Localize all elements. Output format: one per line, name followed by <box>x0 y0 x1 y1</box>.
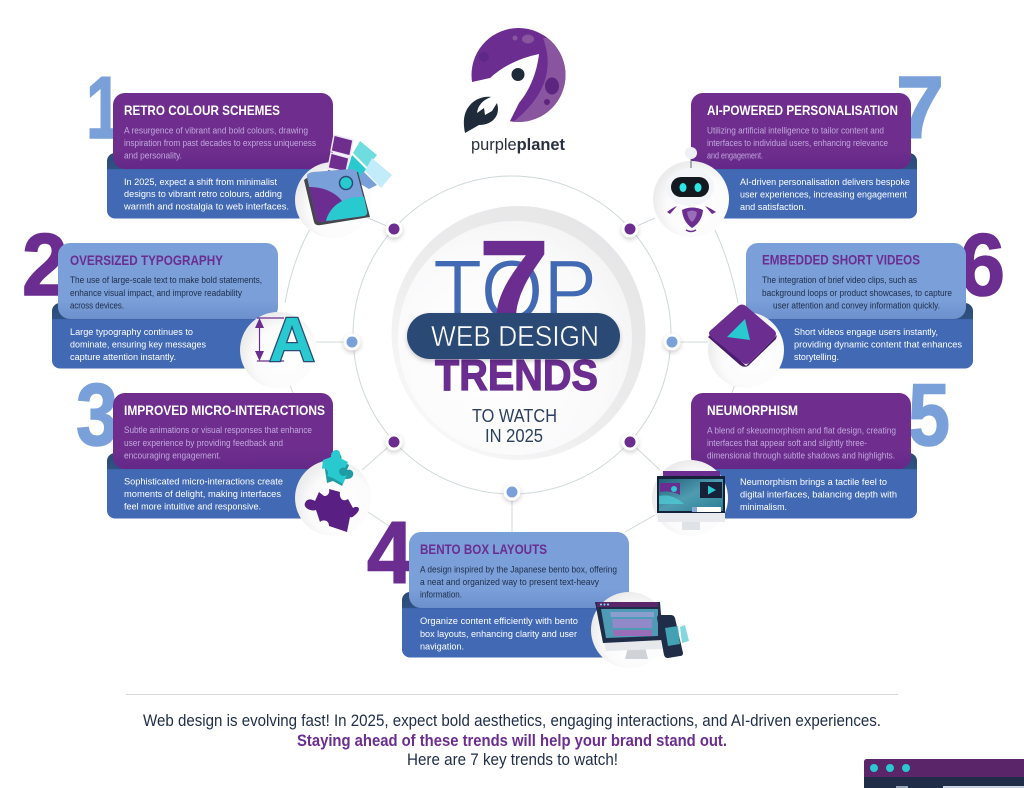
title pill: WEB DESIGN: WEB DESIGN <box>431 321 599 353</box>
detail text: warmth and nostalgia to web interfaces. <box>123 202 289 212</box>
detail text: Neumorphism brings a tactile feel to <box>740 477 887 488</box>
number 5: 5 <box>908 365 950 464</box>
title block <box>407 218 620 446</box>
number 1: 1 <box>86 58 122 157</box>
description: across devices. <box>70 300 124 310</box>
description: A blend of skeuomorphism and flat design, creating <box>707 426 896 436</box>
panel: 5 neumorphism <box>652 365 950 536</box>
icon: desktop monitor <box>652 460 728 536</box>
description: encouraging engagement. <box>124 450 221 460</box>
description <box>124 126 317 160</box>
panel: 7 ai-powered personalisation <box>653 58 944 237</box>
detail text <box>124 476 283 512</box>
description: and engagement. <box>707 150 763 160</box>
detail text: minimalism. <box>740 502 787 513</box>
icon: robot assistant <box>653 147 729 237</box>
heading: NEUMORPHISM <box>707 402 798 418</box>
detail text: providing dynamic content that enhances <box>794 340 962 350</box>
detail text: storytelling. <box>794 352 839 363</box>
detail text: In 2025, expect a shift from minimalist <box>124 177 277 188</box>
description: A design inspired by the Japanese bento box, offering <box>420 564 617 574</box>
detail text <box>740 477 897 513</box>
heading: EMBEDDED SHORT VIDEOS <box>762 252 920 268</box>
heading: RETRO COLOUR SCHEMES <box>124 102 280 118</box>
description: information. <box>420 590 462 600</box>
description: The use of large-scale text to make bold statements, <box>70 275 262 285</box>
description: The integration of brief video clips, such as <box>762 275 918 285</box>
heading: AI-POWERED PERSONALISATION <box>707 102 898 118</box>
panel: 3 improved micro-interactions <box>76 365 371 536</box>
number 2: 2 <box>22 215 68 314</box>
detail text: dominate, ensuring key messages <box>70 340 206 350</box>
description <box>124 425 312 460</box>
number 6: 6 <box>959 215 1005 314</box>
detail text: digital interfaces, balancing depth with <box>740 490 897 500</box>
title numeral: 7: 7 <box>479 218 549 345</box>
description: and personality. <box>124 150 182 160</box>
detail text: AI-driven personalisation delivers bespoke <box>740 177 910 188</box>
description: user attention and convey information quickly. <box>773 300 940 310</box>
subtitle: TO WATCH <box>472 405 557 426</box>
browser window graphic <box>864 759 1024 788</box>
title word: TOP: TOP <box>433 243 597 339</box>
detail text <box>420 616 578 652</box>
panel: 6 embedded short videos <box>708 215 1005 388</box>
footer text: Here are 7 key trends to watch! <box>407 751 618 769</box>
panel: 2 oversized typography <box>22 215 316 388</box>
panel: 1 retro colour schemes <box>86 58 392 238</box>
description <box>420 564 617 600</box>
detail text: navigation. <box>420 642 464 652</box>
footer text <box>143 712 881 769</box>
panel: 4 bento box layouts <box>367 503 689 668</box>
icon: planet and rocket <box>458 28 570 133</box>
detail text: user experiences, increasing engagement <box>740 190 907 200</box>
description: background loops or product showcases, to capture <box>762 288 952 298</box>
icon: colour swatches and image tile <box>295 135 392 238</box>
logo wordmark: purpleplanet <box>471 135 565 154</box>
description: interfaces to individual users, enhancing relevance <box>707 138 888 148</box>
description <box>70 275 262 310</box>
logo: purple planet <box>458 28 570 154</box>
heading: OVERSIZED TYPOGRAPHY <box>70 252 224 268</box>
detail text: Organize content efficiently with bento <box>420 616 578 627</box>
detail text: capture attention instantly. <box>70 352 176 363</box>
description: inspiration from past decades to express uniqueness <box>124 138 317 148</box>
central circle <box>392 206 646 460</box>
description <box>762 275 952 310</box>
icon: puzzle pieces <box>295 450 371 536</box>
description <box>707 126 888 160</box>
title word: TRENDS: TRENDS <box>435 351 598 400</box>
detail text: Sophisticated micro-interactions create <box>124 476 283 488</box>
detail text: moments of delight, making interfaces <box>124 489 281 500</box>
number 7: 7 <box>896 58 944 157</box>
description: dimensional through subtle shadows and highlights. <box>707 450 895 460</box>
footer text: Web design is evolving fast! In 2025, expect bold aesthetics, engaging interactions, and AI-driven experiences. <box>143 712 881 730</box>
number 3: 3 <box>76 365 118 464</box>
title pill: WEB DESIGN <box>407 313 620 359</box>
connector lines <box>285 176 738 532</box>
icon: oversized letter A <box>240 306 316 388</box>
description: Utilizing artificial intelligence to tailor content and <box>707 126 884 136</box>
footer divider <box>126 694 898 695</box>
description: user experience by providing feedback and <box>124 438 283 448</box>
detail text <box>70 327 206 363</box>
description: a neat and organized way to present text-heavy <box>420 577 600 587</box>
icon: oversized letter A: A <box>269 306 315 375</box>
description: Subtle animations or visual responses that enhance <box>124 425 312 435</box>
number 4: 4 <box>367 503 413 602</box>
heading: IMPROVED MICRO-INTERACTIONS <box>124 402 325 418</box>
detail text: box layouts, enhancing clarity and user <box>420 629 578 640</box>
connector dots <box>344 220 680 500</box>
description: A resurgence of vibrant and bold colours, drawing <box>124 126 308 136</box>
heading: BENTO BOX LAYOUTS <box>420 541 547 557</box>
subtitle <box>472 405 557 446</box>
detail text: and satisfaction. <box>740 202 806 213</box>
description: enhance visual impact, and improve readability <box>70 288 243 298</box>
detail text: Large typography continues to <box>70 327 193 338</box>
icon: video play tile <box>708 304 784 388</box>
detail text: feel more intuitive and responsive. <box>124 502 261 512</box>
detail text <box>740 177 910 213</box>
footer text: Staying ahead of these trends will help your brand stand out. <box>297 732 727 750</box>
subtitle: IN 2025 <box>485 425 543 446</box>
detail text: Short videos engage users instantly, <box>794 327 938 338</box>
detail text <box>794 327 962 363</box>
description: interfaces that appear soft and slightly three- <box>707 438 867 448</box>
detail text <box>123 177 289 212</box>
detail text: designs to vibrant retro colours, adding <box>124 189 282 200</box>
description <box>707 426 896 460</box>
icon: monitor and phone <box>591 592 689 668</box>
